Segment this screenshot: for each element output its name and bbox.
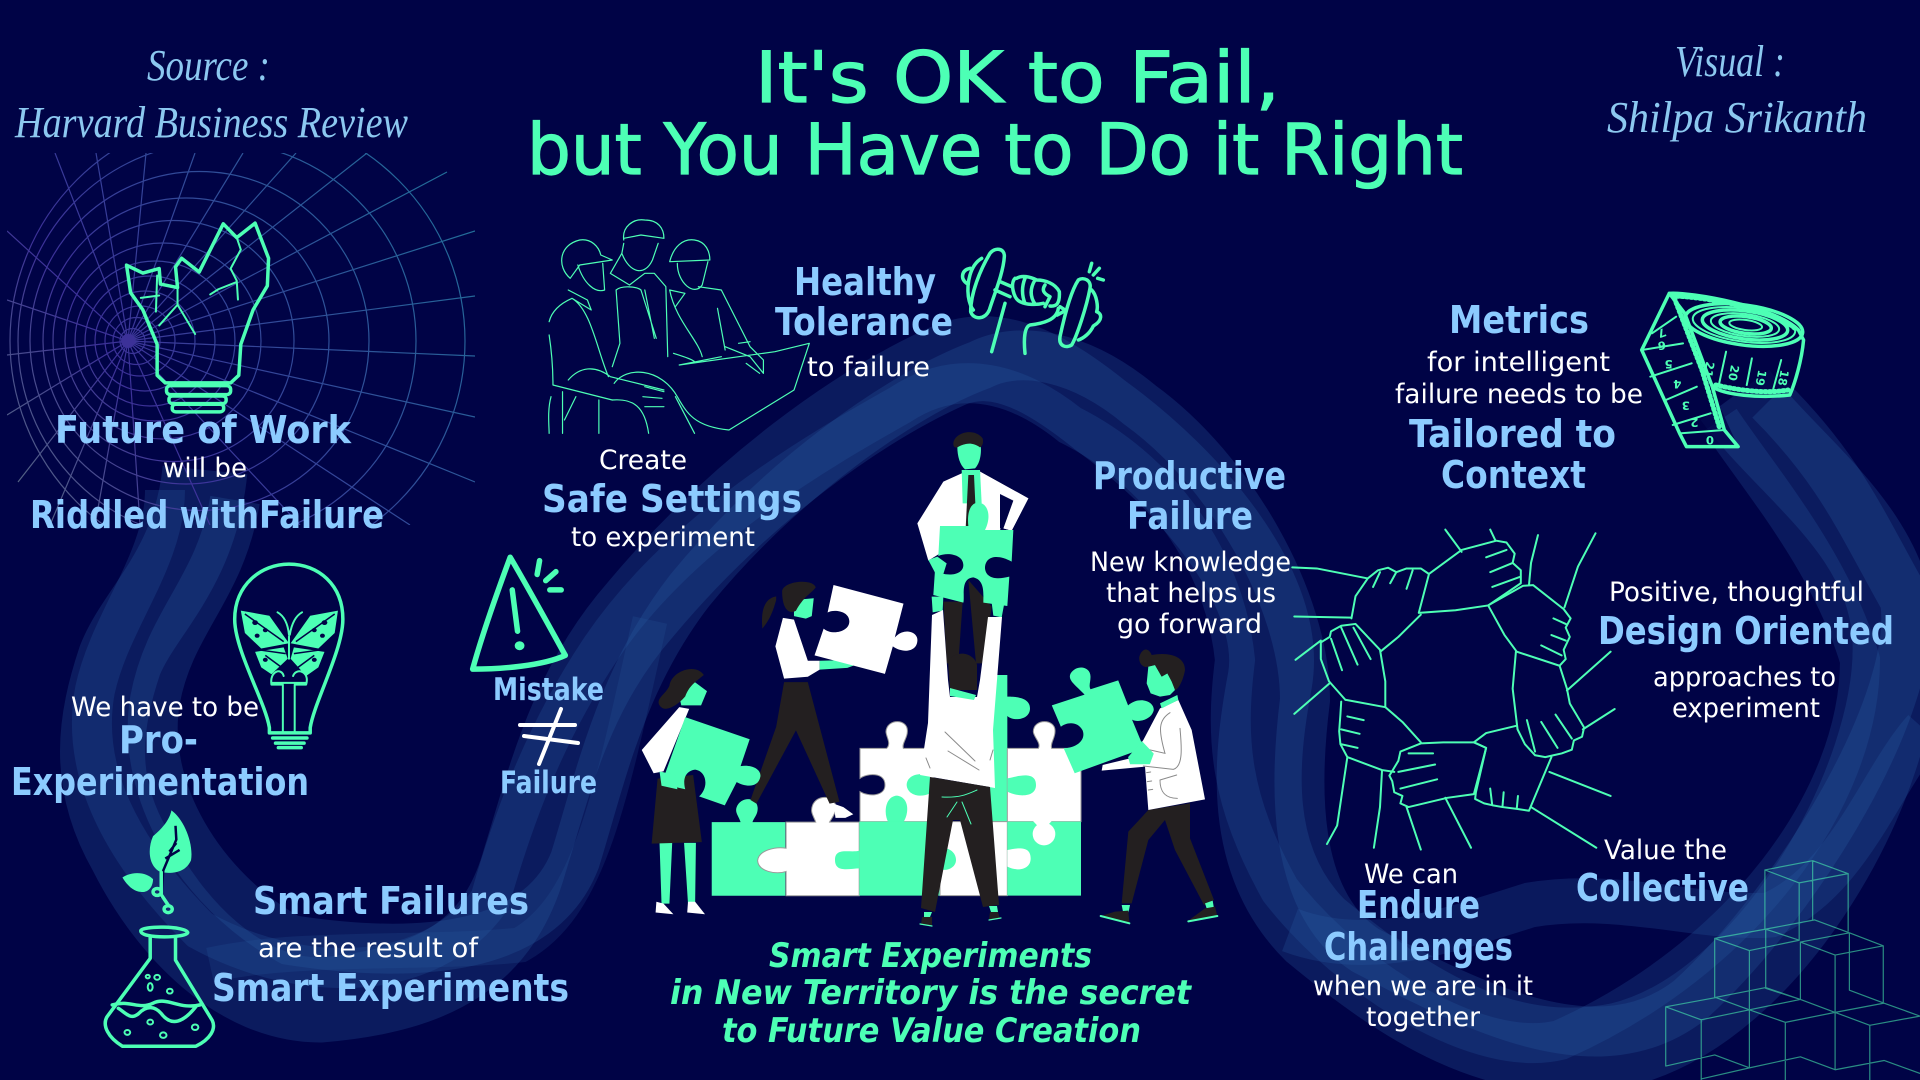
text: pro-experimentation: Experimentation (11, 760, 309, 804)
title: It's OK to Fail, (755, 37, 1280, 119)
icon: not equal sign (520, 709, 578, 764)
text: endure challenges: We can (1364, 859, 1458, 890)
text: safe settings: Create (599, 445, 687, 476)
icon: tape measure: 18 (1775, 369, 1792, 387)
text: future of work: Future of Work (55, 408, 352, 452)
text: metrics (1395, 298, 1643, 497)
text: center message: Smart Experiments (769, 936, 1092, 976)
icon: linked hands circle (1292, 530, 1615, 850)
text: mistake not equal failure: Failure (500, 765, 597, 801)
spiderweb grid (7, 153, 475, 525)
icon: workers line drawing (549, 220, 809, 433)
puzzle wall (712, 675, 1081, 896)
text: center message: to Future Value Creation (722, 1011, 1141, 1051)
icon: wireframe cubes (1666, 861, 1920, 1080)
icon: tape measure: 4 (1673, 377, 1681, 391)
figure: man lifting from below (920, 610, 1002, 926)
puzzle piece held by right man (1052, 667, 1154, 773)
text: mistake not equal failure (493, 672, 604, 801)
icon: broken light bulb (127, 223, 269, 412)
text: future of work: will be (163, 453, 247, 484)
source credit (14, 41, 409, 147)
icon: flask with sprout (105, 810, 213, 1046)
illustration: puzzle team (642, 432, 1217, 926)
icon: tape measure (1642, 293, 1806, 447)
icon: tape measure: 19 (1752, 369, 1769, 387)
title: but You Have to Do it Right (527, 109, 1463, 191)
text: pro-experimentation: We have to be (71, 692, 259, 723)
text: smart failures (212, 879, 569, 1010)
text: value the collective (1576, 835, 1749, 910)
figure: woman with white puzzle (750, 582, 917, 818)
text: pro-experimentation: Pro- (119, 718, 198, 762)
text: productive failure: that helps us (1106, 578, 1276, 609)
figure: woman with teal puzzle (642, 669, 760, 914)
text: metrics: failure needs to be (1395, 379, 1643, 410)
visual credit: Shilpa Srikanth (1607, 93, 1867, 142)
text: safe settings: Safe Settings (542, 477, 802, 521)
text: mistake not equal failure: Mistake (493, 672, 604, 708)
text: healthy tolerance: Healthy (794, 260, 936, 304)
icon: tape measure: 5 (1665, 357, 1673, 371)
icon: tape measure: 20 (1725, 364, 1742, 382)
icon: tape measure: 3 (1682, 399, 1690, 412)
text: pro-experimentation (11, 692, 309, 804)
text: value the collective: Collective (1576, 866, 1749, 910)
text: center message (670, 936, 1193, 1051)
text: metrics: Metrics (1449, 298, 1589, 342)
text: productive failure: go forward (1117, 609, 1262, 640)
text: smart failures: Smart Experiments (212, 966, 569, 1010)
text: safe settings (542, 445, 802, 553)
text: healthy tolerance: Tolerance (775, 300, 953, 344)
text: design oriented (1598, 577, 1894, 724)
icon: butterfly bulb (235, 564, 343, 748)
icon: tape measure: 2 (1690, 415, 1699, 429)
figure: man on top with puzzle (917, 432, 1028, 663)
icon: tape measure: 21 (1701, 361, 1717, 379)
text: endure challenges: Endure (1357, 883, 1480, 927)
text: productive failure: New knowledge (1090, 547, 1291, 578)
text: healthy tolerance: to failure (807, 352, 930, 383)
text: future of work (30, 408, 384, 537)
icon: tape measure: 6 (1657, 338, 1666, 353)
icon: tape measure: 7 (1656, 325, 1668, 341)
text: center message: in New Territory is the secret (670, 973, 1193, 1013)
source credit: Harvard Business Review (14, 98, 409, 147)
text: endure challenges: Challenges (1324, 925, 1513, 969)
text: future of work: Riddled withFailure (30, 493, 384, 537)
text: value the collective: Value the (1604, 835, 1727, 866)
text: productive failure (1090, 454, 1291, 640)
text: healthy tolerance (775, 260, 953, 383)
text: productive failure: Productive (1093, 454, 1286, 498)
title (527, 37, 1463, 191)
source credit: Source : (147, 41, 270, 90)
icon: warning triangle (473, 557, 565, 669)
visual credit: Visual : (1675, 37, 1785, 86)
text: design oriented: Positive, thoughtful (1609, 577, 1864, 608)
text: metrics: for intelligent (1427, 347, 1610, 378)
text: metrics: Tailored to (1409, 412, 1616, 456)
visual credit (1607, 37, 1867, 142)
text: smart failures: are the result of (258, 933, 480, 964)
text: safe settings: to experiment (571, 522, 755, 553)
text: metrics: Context (1441, 453, 1586, 497)
text: endure challenges: together (1366, 1002, 1481, 1033)
text: smart failures: Smart Failures (253, 879, 529, 923)
icon: dumbbell (963, 249, 1103, 353)
flowing ribbon waves (92, 355, 1920, 1050)
text: endure challenges: when we are in it (1313, 971, 1533, 1002)
text: endure challenges (1313, 859, 1533, 1033)
text: design oriented: approaches to (1653, 662, 1836, 693)
icon: tape measure: 0 (1706, 433, 1714, 447)
figure: man with teal puzzle (1101, 650, 1217, 923)
text: design oriented: experiment (1672, 693, 1820, 724)
text: productive failure: Failure (1127, 494, 1253, 538)
